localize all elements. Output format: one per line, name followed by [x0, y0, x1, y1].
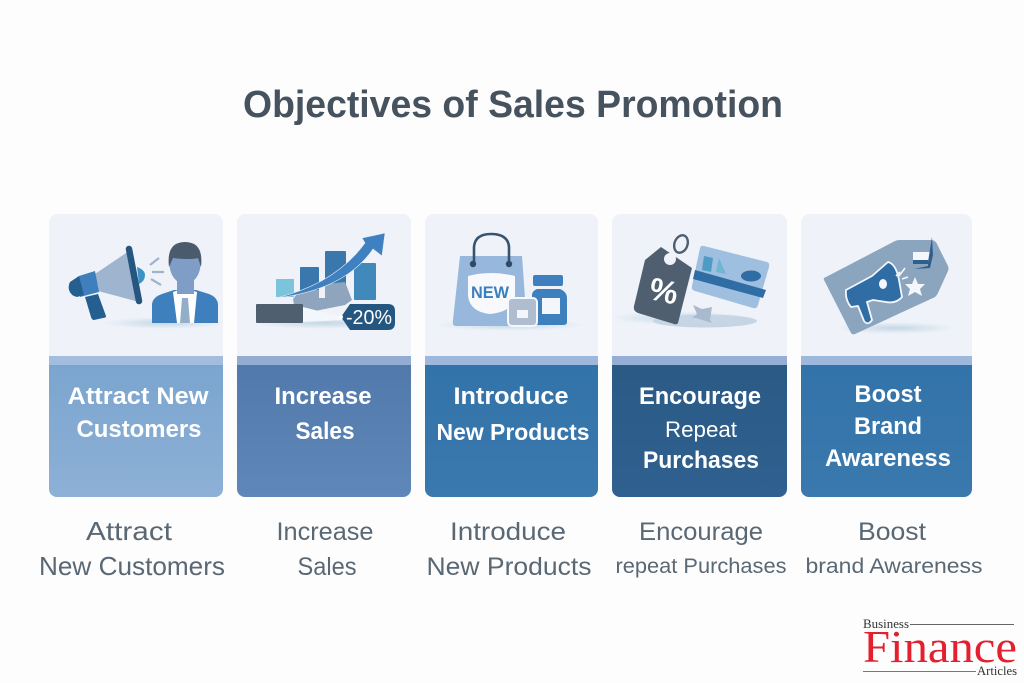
caption: Boost brand Awareness: [806, 518, 982, 578]
logo: Business Finance Articles: Finance: [863, 621, 1017, 672]
logo: Business Finance Articles: Articles: [977, 664, 1017, 678]
panel: attract new customers: Customers: [76, 416, 202, 443]
icon: shopping bag and jar: NEW: [471, 283, 510, 302]
icon: megaphone and businessman: [69, 242, 227, 329]
caption: Increase Sales: Increase: [276, 518, 374, 546]
panel: introduce new products: New Products: [436, 419, 590, 445]
label: Attract New Customers: Attract New: [68, 383, 209, 410]
caption: Introduce New Products: New Products: [426, 553, 592, 581]
caption: Increase Sales: Sales: [298, 553, 356, 581]
title: Objectives of Sales Promotion: [243, 84, 783, 126]
panel: boost brand awareness: Awareness: [825, 445, 951, 472]
icon: price tag and credit card: %: [646, 270, 681, 312]
panel: introduce new products: [425, 214, 598, 497]
label: Increase Sales: Increase: [274, 383, 372, 410]
caption: Boost brand Awareness: brand Awareness: [806, 555, 982, 578]
caption: Boost brand Awareness: Boost: [858, 518, 926, 546]
panel: attract new customers: [49, 214, 227, 497]
caption: Attract New Customers: [39, 516, 225, 581]
logo: Business Finance Articles: Business: [863, 617, 909, 631]
caption: Increase Sales: [276, 518, 374, 581]
label: Introduce New Products: Introduce: [454, 383, 568, 410]
panel: encourage repeat purchases: Repeat: [665, 417, 737, 442]
caption: Encourage repeat Purchases: [616, 518, 786, 578]
panel: encourage repeat purchases: [610, 214, 787, 497]
icon: shopping bag and jar: [435, 234, 585, 331]
icon: growth chart with discount: [250, 233, 400, 330]
icon: tag with megaphone: [824, 237, 955, 334]
panel: increase sales: Sales: [296, 418, 354, 445]
label: Boost Brand Awareness: Boost: [854, 381, 922, 408]
panel: boost brand awareness: Brand: [854, 413, 922, 440]
caption: Introduce New Products: [426, 518, 592, 581]
icon: growth chart with discount: -20%: [346, 307, 392, 329]
panel: boost brand awareness: [801, 214, 972, 497]
caption: Attract New Customers: New Customers: [39, 551, 225, 581]
caption: Introduce New Products: Introduce: [450, 518, 566, 546]
panel: encourage repeat purchases: Purchases: [643, 447, 759, 474]
caption: Encourage repeat Purchases: repeat Purchases: [616, 555, 786, 578]
icon: price tag and credit card: [610, 233, 769, 328]
caption: Attract New Customers: Attract: [86, 516, 173, 546]
panel: increase sales: [237, 214, 411, 497]
label: Encourage Repeat Purchases: Encourage: [639, 383, 761, 410]
caption: Encourage repeat Purchases: Encourage: [639, 518, 763, 546]
